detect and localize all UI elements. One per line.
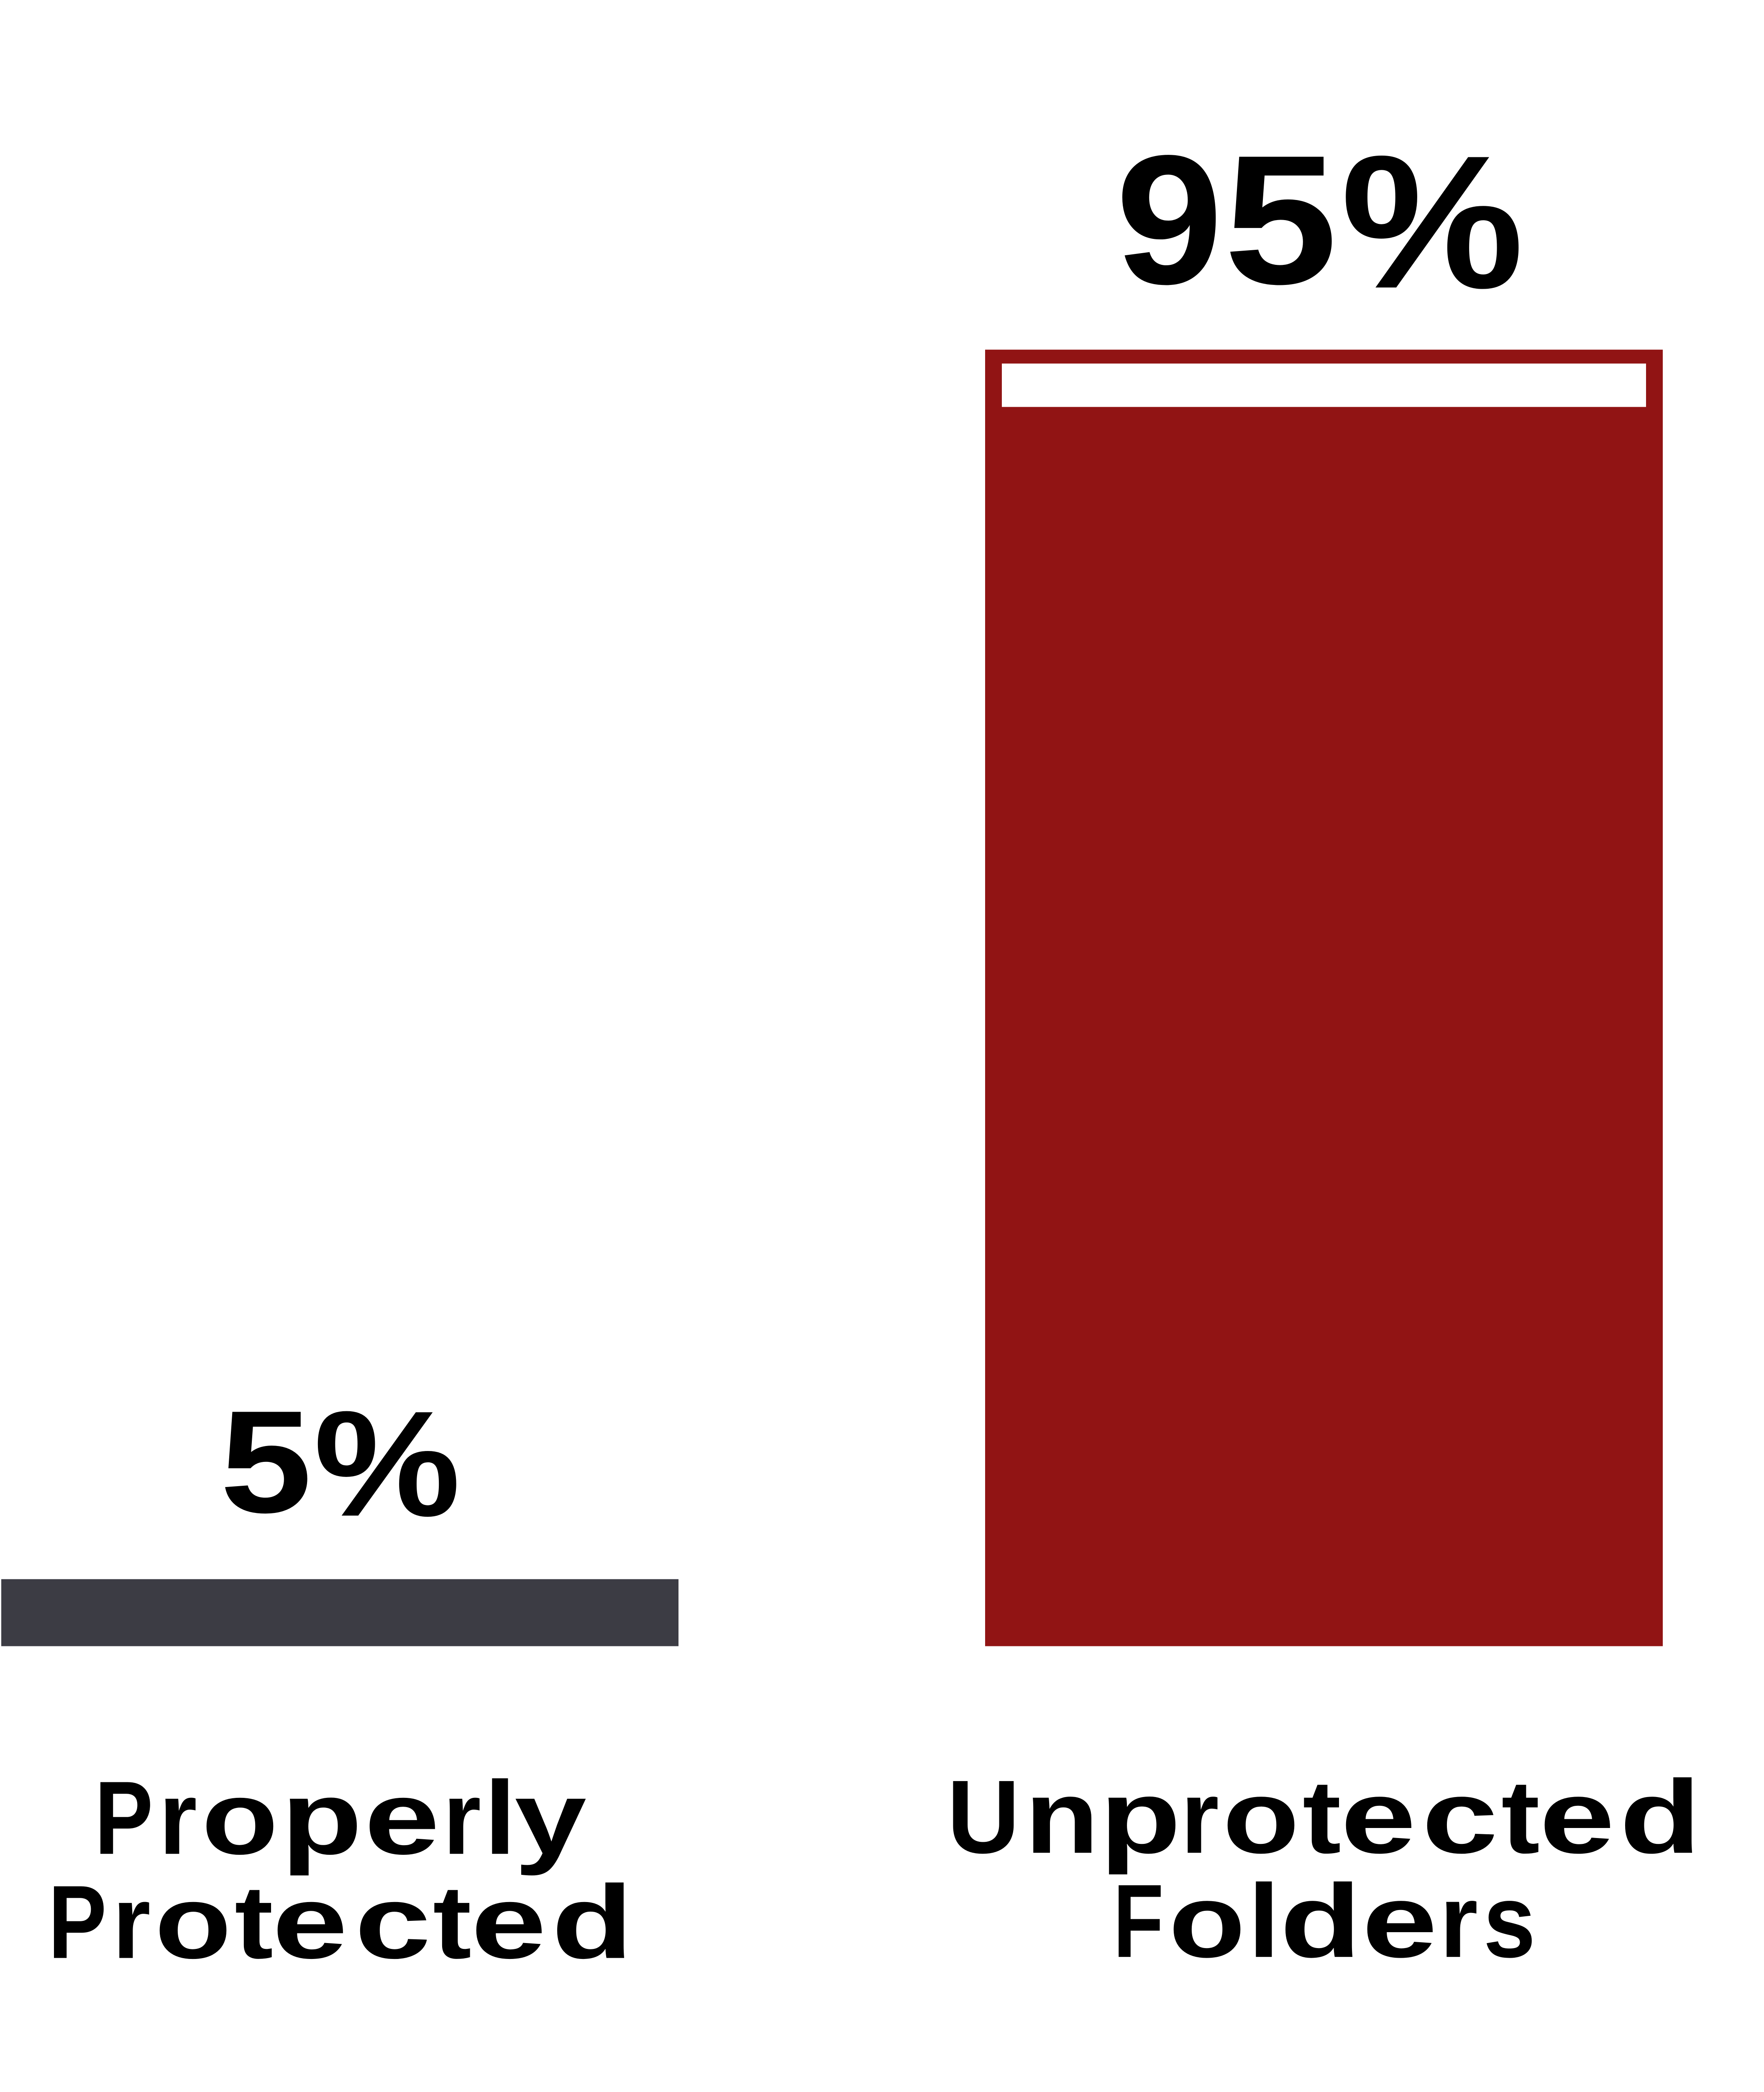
category label: Unprotected Folders: l [1248, 1863, 1280, 1979]
category label: Properly Protected: l [484, 1760, 516, 1876]
category label: Unprotected Folders: d [1620, 1759, 1701, 1875]
category label: Properly Protected: t [235, 1864, 273, 1980]
bar: properly protected [1, 1579, 678, 1646]
value label: 95%: % [1341, 116, 1524, 328]
category label: Properly Protected: t [433, 1864, 471, 1980]
category label: Properly Protected: p [281, 1760, 362, 1877]
category label: Properly Protected: c [355, 1864, 431, 1980]
category label: Properly Protected: o [202, 1760, 278, 1876]
category label: Unprotected Folders [947, 1759, 1701, 1979]
category label: Unprotected Folders: e [1539, 1759, 1615, 1875]
category label: Properly Protected: y [515, 1760, 587, 1877]
value label: 95% [1116, 116, 1524, 328]
value label: 95%: 5 [1224, 117, 1337, 323]
category label: Properly Protected: o [155, 1864, 231, 1980]
category label: Unprotected Folders: d [1280, 1863, 1361, 1979]
value label: 5%: % [314, 1379, 461, 1548]
category label: Properly Protected: e [272, 1864, 348, 1980]
category label: Unprotected Folders: U [947, 1759, 1020, 1875]
category label: Properly Protected: r [443, 1760, 481, 1876]
category label: Unprotected Folders: o [1223, 1759, 1299, 1875]
category label: Properly Protected: e [471, 1864, 546, 1980]
category label: Unprotected Folders: r [1440, 1863, 1478, 1979]
category label: Properly Protected: r [113, 1864, 151, 1980]
category label: Unprotected Folders: c [1422, 1759, 1498, 1875]
category label: Unprotected Folders: F [1113, 1863, 1164, 1979]
category label: Unprotected Folders: e [1362, 1863, 1437, 1979]
category label: Properly Protected: d [552, 1864, 633, 1980]
category label: Unprotected Folders: o [1169, 1863, 1245, 1979]
category label: Properly Protected: r [159, 1760, 197, 1876]
value label: 95%: 9 [1116, 117, 1223, 323]
value label: 5%: 5 [220, 1380, 312, 1543]
category label: Unprotected Folders: n [1025, 1759, 1099, 1875]
category label: Properly Protected [48, 1760, 633, 1980]
bar top gap [1002, 364, 1646, 407]
category label: Unprotected Folders: t [1303, 1759, 1341, 1875]
category label: Unprotected Folders: t [1501, 1759, 1540, 1875]
category label: Unprotected Folders: r [1181, 1759, 1219, 1875]
category label: Properly Protected: e [364, 1760, 440, 1876]
category label: Unprotected Folders: p [1100, 1759, 1181, 1876]
category label: Unprotected Folders: e [1341, 1759, 1416, 1875]
category label: Properly Protected: P [95, 1760, 153, 1876]
value label: 5% [220, 1379, 461, 1548]
category label: Unprotected Folders: s [1483, 1863, 1536, 1979]
category label: Properly Protected: P [48, 1864, 107, 1980]
bar: unprotected folders [985, 350, 1663, 1646]
